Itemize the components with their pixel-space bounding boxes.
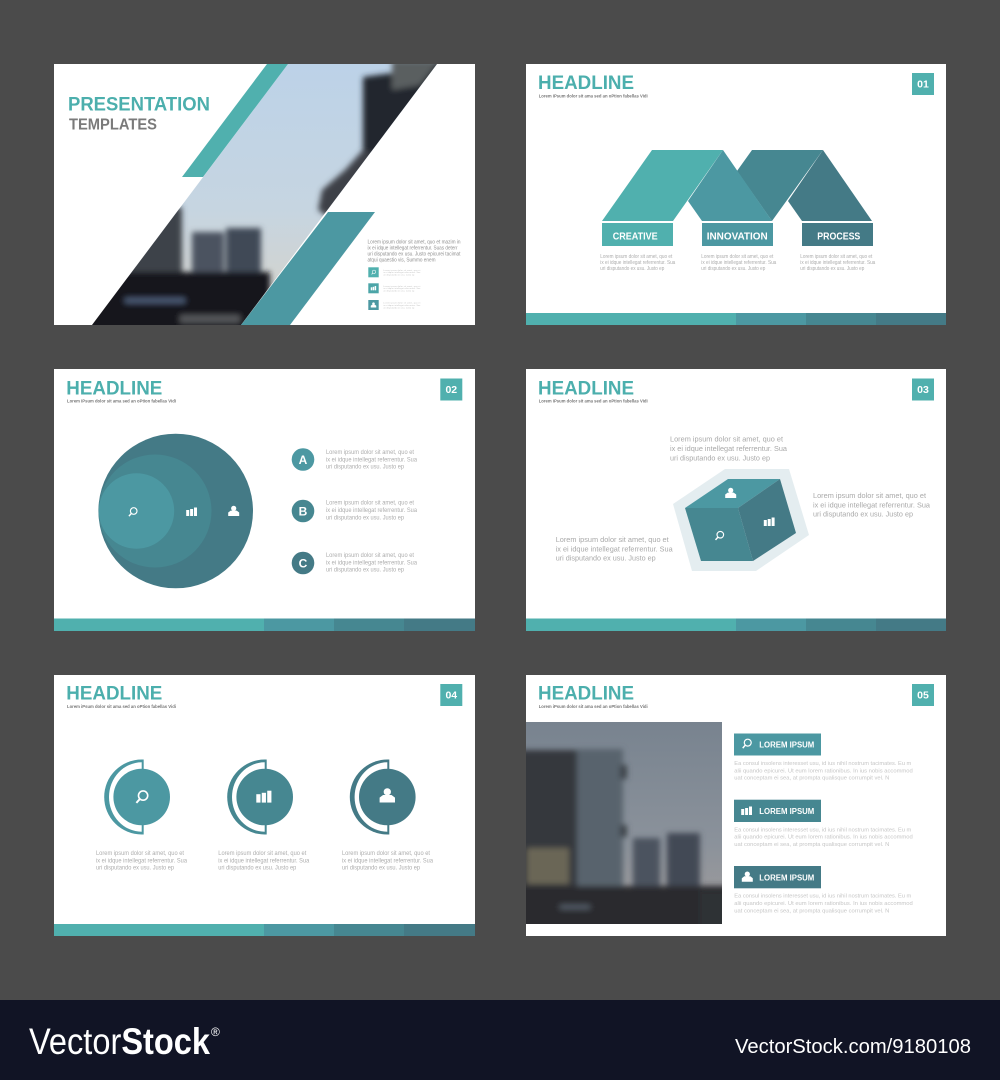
icon: bars [764,518,775,526]
number badge [912,73,934,95]
body text: innovation [701,254,777,272]
item C: C [299,556,308,570]
item C [292,552,417,574]
body text 1: ix ei idque intellegat referrentur. Sua [96,857,187,864]
headline: HEADLINE [538,683,634,705]
body text 3: Lorem ipsum dolor sit amet, quo et [342,850,430,857]
item B [292,500,417,522]
image id url: VectorStock.com/9180108 [735,1036,971,1058]
item B: ix ei idque intellegat referrentur. Sua [326,507,417,514]
cover body text [368,240,461,264]
sub headline: Lorem iPsum dolor sit ama sed an oPtion fabellas Vidi [67,399,176,404]
number badge: 03 [917,384,929,396]
cover icon list: Lorem ipsum dolor sit amet, quo et [383,302,421,304]
item A: uri disputando ex usu. Justo ep [326,464,404,471]
ring icon: bars [227,760,293,834]
cover body text: atqui quaestio vis, Summo enem [368,258,436,264]
cover icon list: uri disputando ex usu. Justo ep [383,306,415,309]
description 1: uat conceptam ei sea, at prompta qualisque corrumpit vel. N [734,776,889,782]
text above cube [670,435,788,462]
text right of cube: Lorem ipsum dolor sit amet, quo et [813,491,927,500]
label: innovation: INNOVATION [707,231,768,242]
body text: process [800,254,876,272]
lower teal stripe [241,212,375,325]
description 2: alii quando epicurei. Ut eum lorem rationibus. In ius nobis accommod [734,835,913,841]
body text: creative: ix ei idque intellegat referrentur. Sua [600,260,676,266]
text left of cube: ix ei idque intellegat referrentur. Sua [556,544,673,553]
description 2: uat conceptam ei sea, at prompta qualisque corrumpit vel. N [734,842,889,848]
number badge: 01 [917,79,929,91]
panel: slide 05 [515,675,946,936]
sub headline: Lorem iPsum dolor sit ama sed an oPtion fabellas Vidi [67,704,176,709]
text left of cube: uri disputando ex usu. Justo ep [556,554,656,563]
body text: innovation: ix ei idque intellegat referrentur. Sua [701,260,777,266]
footer colour bar [526,618,946,631]
label 3 [734,866,821,888]
label: process: PROCESS [817,231,861,242]
label 1 [734,734,821,756]
item B: B [299,504,308,518]
cover icon list: uri disputando ex usu. Justo ep [383,290,415,293]
label 3: LOREM IPSUM [759,873,815,882]
description 3 [734,894,913,914]
headline: HEADLINE [66,683,162,705]
number badge: 04 [445,690,457,702]
ring icon: search [104,760,170,834]
cover icon list: ix ei idque intellegat referrentur. Sua [383,287,421,290]
item A: A [299,453,308,467]
label 2: LOREM IPSUM [759,807,815,816]
registered mark: ® [211,1025,220,1039]
text above cube: ix ei idque intellegat referrentur. Sua [670,444,788,453]
cube diagram [673,469,809,571]
description 3: uat conceptam ei sea, at prompta qualisque corrumpit vel. N [734,908,889,914]
sub headline: Lorem iPsum dolor sit ama sed an oPtion fabellas Vidi [539,399,648,404]
panel: slide 02 [54,369,475,631]
text right of cube: uri disputando ex usu. Justo ep [813,510,913,519]
panel: slide 03 [526,369,946,631]
body text: innovation: Lorem ipsum dolor sit amet, quo et [701,254,774,260]
item C: uri disputando ex usu. Justo ep [326,567,404,574]
item B: Lorem ipsum dolor sit amet, quo et [326,500,414,507]
body text: innovation: uri disputando ex usu. Justo ep [701,266,765,272]
photo: blurred city skyline [526,722,722,924]
body text 1 [96,850,187,872]
number badge [912,684,934,706]
headline: HEADLINE [538,377,634,399]
body text 2 [218,850,310,872]
number badge [912,378,934,400]
label 2 [734,800,821,822]
icon: search [129,508,137,516]
description 2 [734,827,913,848]
text left of cube: Lorem ipsum dolor sit amet, quo et [556,535,670,544]
cover icon list [368,267,421,310]
item A: Lorem ipsum dolor sit amet, quo et [326,449,414,456]
icon: person [228,506,239,516]
text above cube: uri disputando ex usu. Justo ep [670,453,770,462]
text left of cube [556,535,673,563]
description 1: alii quando epicurei. Ut eum lorem rationibus. In ius nobis accommod [734,768,913,774]
description 2: Ea consul insolens interesset usu, id ius nihil nostrum tacimates. Eu m [734,827,912,833]
cover icon list: ix ei idque intellegat referrentur. Sua [383,304,421,307]
label: creative [602,223,673,246]
panel: slide 04 [54,675,475,936]
icon: search [716,531,724,540]
icon: person [725,488,736,498]
icon: bars [186,508,197,516]
ring icon: person [350,760,416,834]
body text 1: uri disputando ex usu. Justo ep [96,865,174,872]
folded ribbon chart [602,150,872,221]
label: innovation [702,223,773,246]
body text 3 [342,850,433,872]
item B: uri disputando ex usu. Justo ep [326,514,404,521]
cover icon list: Lorem ipsum dolor sit amet, quo et [383,269,421,272]
panel: slide 01 [526,64,946,325]
body text 3: ix ei idque intellegat referrentur. Sua [342,857,433,864]
sub headline: Lorem iPsum dolor sit ama sed an oPtion fabellas Vidi [539,704,648,709]
label 1: LOREM IPSUM [759,740,815,749]
headline: HEADLINE [66,377,162,399]
body text: process: Lorem ipsum dolor sit amet, quo et [800,254,873,260]
footer colour bar [526,313,946,325]
description 3: Ea consul insolens interesset usu, id ius nihil nostrum tacimates. Eu m [734,894,912,900]
item C: Lorem ipsum dolor sit amet, quo et [326,552,414,559]
logo: VectorStock [29,1021,210,1062]
number badge [440,684,462,706]
body text 2: ix ei idque intellegat referrentur. Sua [218,857,310,864]
cover body text: ix ei idque intellegat referrentur. Suas deterr [368,246,458,252]
nested circles chart [98,434,253,588]
body text 1: Lorem ipsum dolor sit amet, quo et [96,850,184,857]
cover body text: Lorem ipsum dolor sit amet, quo et mazim in [368,240,460,246]
cover subtitle: TEMPLATES [69,117,157,134]
cover photo: blurred city skyline [92,64,437,325]
upper teal stripe [182,64,288,177]
body text 2: Lorem ipsum dolor sit amet, quo et [218,850,306,857]
body text 3: uri disputando ex usu. Justo ep [342,865,420,872]
cover body text: uri disputando ex usu. Justo epicurei tacimat [368,252,461,258]
body text: creative: uri disputando ex usu. Justo ep [600,266,664,272]
number badge: 05 [917,690,929,702]
number badge [440,378,462,400]
item A [292,448,417,471]
cover icon list: ix ei idque intellegat referrentur. Sua [383,271,421,274]
text right of cube [813,491,931,519]
number badge: 02 [445,384,457,396]
text right of cube: ix ei idque intellegat referrentur. Sua [813,500,931,509]
footer band [0,1000,1000,1080]
item A: ix ei idque intellegat referrentur. Sua [326,456,417,463]
footer colour bar [54,618,475,631]
body text: creative [600,254,676,272]
body text: creative: Lorem ipsum dolor sit amet, quo et [600,254,673,260]
body text 2: uri disputando ex usu. Justo ep [218,865,297,872]
cover icon list: uri disputando ex usu. Justo ep [383,274,415,277]
cover icon list: Lorem ipsum dolor sit amet, quo et [383,285,421,288]
footer colour bar [54,924,475,936]
description 1: Ea consul insolens interesset usu, id ius nihil nostrum tacimates. Eu m [734,761,912,767]
body text: process: uri disputando ex usu. Justo ep [800,266,864,272]
description 1 [734,761,913,782]
body text: process: ix ei idque intellegat referrentur. Sua [800,260,876,266]
description 3: alii quando epicurei. Ut eum lorem rationibus. In ius nobis accommod [734,901,913,907]
text above cube: Lorem ipsum dolor sit amet, quo et [670,435,784,444]
cover title: PRESENTATION [68,94,210,116]
item C: ix ei idque intellegat referrentur. Sua [326,559,417,566]
label: process [802,223,873,246]
headline: HEADLINE [538,72,634,94]
label: creative: CREATIVE [613,231,658,242]
panel: cover slide [54,60,475,332]
sub headline: Lorem iPsum dolor sit ama sed an oPtion fabellas Vidi [539,94,648,98]
